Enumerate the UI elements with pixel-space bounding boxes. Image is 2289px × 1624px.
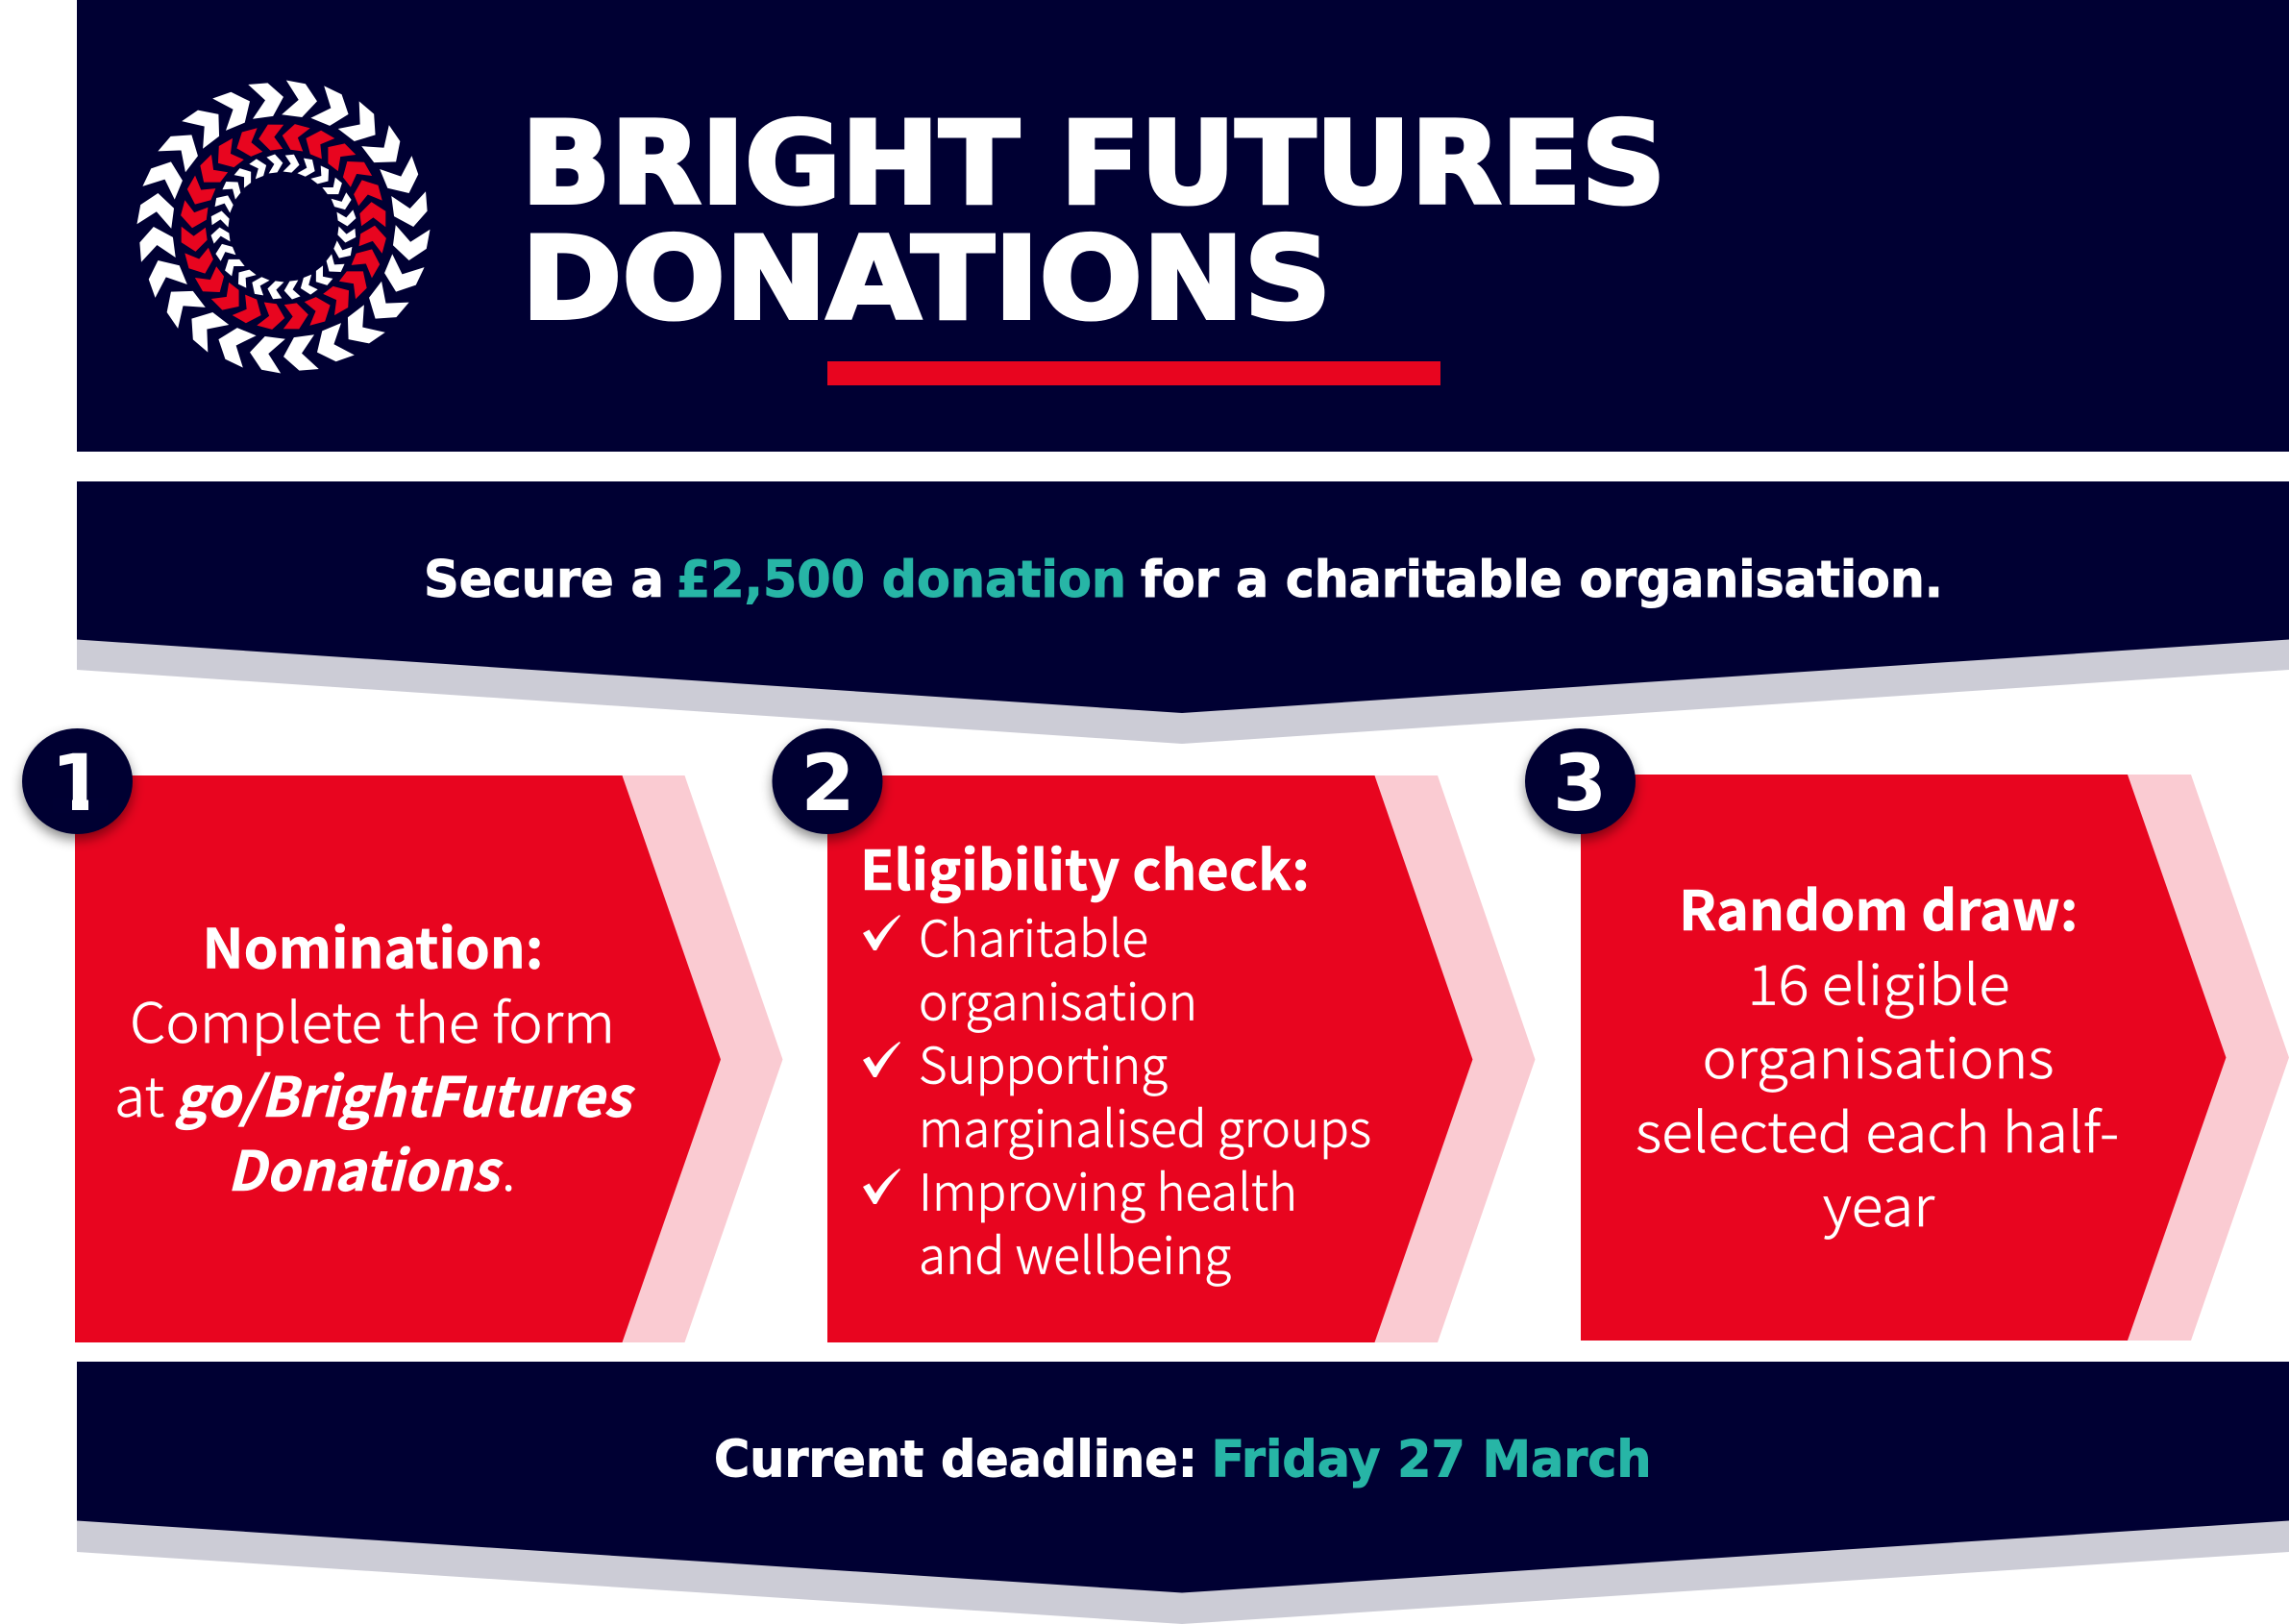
- list: eligibility criteria: Improving health: [919, 1153, 1297, 1224]
- panel: deadline banner: [77, 1362, 2289, 1624]
- text: donation message: Secure a: [424, 551, 664, 609]
- text: step 3 copy: selected each half-: [1636, 1090, 2119, 1169]
- text: deadline message: Friday 27 March: [1211, 1431, 1651, 1489]
- icon: number badge 3: 3: [1553, 739, 1607, 829]
- panel: step 2 eligibility check: [827, 775, 1536, 1342]
- text: step 1 copy: Nomination:: [202, 905, 544, 984]
- list: eligibility criteria: organisation: [919, 963, 1197, 1034]
- panel: step 3 random draw: [1581, 775, 2289, 1341]
- list: eligibility criteria: [863, 899, 1371, 1288]
- text: step 1 copy: [114, 905, 636, 1207]
- text: step 3 copy: organisations: [1703, 1016, 2055, 1095]
- text: step 1 copy: .: [502, 1128, 515, 1207]
- text: donation message: for a charitable organisation.: [1141, 551, 1943, 609]
- icon: number badge 1: 1: [51, 739, 105, 829]
- text: step 3 copy: [1636, 868, 2119, 1243]
- text: step 1 copy: Complete the form: [130, 980, 615, 1059]
- list: eligibility criteria: marginalised groups: [919, 1090, 1371, 1161]
- title underline: [827, 361, 1440, 385]
- icon: number badge 3: [1525, 728, 1636, 834]
- icon: tick 1: [863, 915, 900, 950]
- text: donation message: [424, 551, 1943, 609]
- text: step 1 copy: Donations: [227, 1128, 504, 1207]
- list: eligibility criteria: Supporting: [919, 1026, 1168, 1097]
- title: BRIGHT FUTURES: [521, 98, 1666, 231]
- text: step 2 heading: Eligibility check:: [860, 827, 1310, 906]
- title: [521, 98, 1666, 346]
- panel: header banner: [77, 0, 2289, 452]
- list: eligibility criteria: and wellbeing: [919, 1217, 1231, 1288]
- text: deadline message: Current deadline:: [714, 1431, 1197, 1489]
- icon: tick 2: [863, 1042, 900, 1077]
- icon: number badge 2: 2: [800, 739, 855, 829]
- list: eligibility criteria: Charitable: [919, 899, 1148, 972]
- panel: step 1 nomination: [75, 775, 782, 1342]
- text: step 3 copy: 16 eligible: [1747, 942, 2010, 1021]
- icon: number badge 1: [22, 728, 133, 834]
- text: deadline message: [714, 1431, 1651, 1489]
- icon: chevron ring logo: [137, 81, 430, 373]
- title: DONATIONS: [521, 213, 1332, 346]
- icon: number badge 2: [773, 728, 882, 834]
- panel: donation amount banner: [77, 481, 2289, 744]
- text: step 1 copy: go/BrightFutures: [174, 1054, 636, 1133]
- icon: tick 3: [863, 1169, 900, 1204]
- text: step 3 copy: Random draw:: [1679, 868, 2078, 947]
- text: donation message: £2,500 donation: [677, 551, 1126, 609]
- text: step 3 copy: year: [1823, 1164, 1935, 1243]
- text: step 1 copy: at: [114, 1054, 164, 1133]
